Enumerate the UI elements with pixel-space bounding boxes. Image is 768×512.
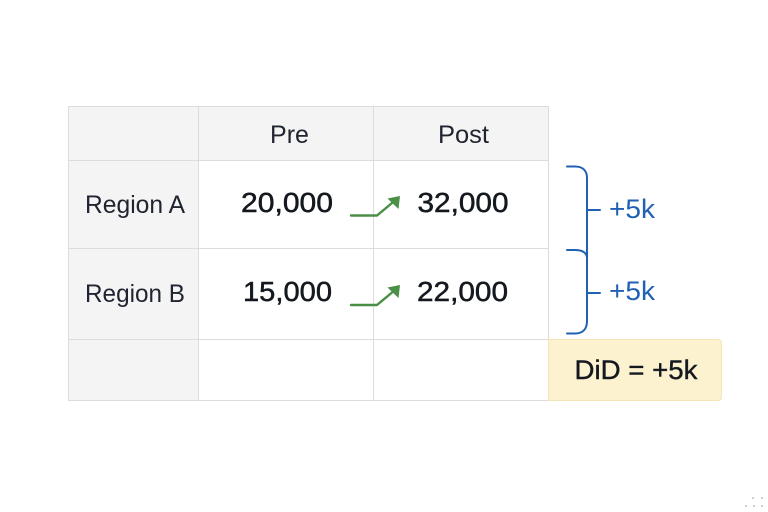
arrow: Region B trend <box>351 285 400 305</box>
column header: Pre: Pre <box>270 121 309 149</box>
value: Region A Post: 32,000 <box>418 187 508 218</box>
bracket: Region B difference <box>567 250 600 334</box>
row label: Region B: Region B <box>85 280 185 308</box>
value: Region B Post: 22,000 <box>417 276 508 307</box>
column header: Post: Post <box>438 121 489 149</box>
arrow: Region A trend <box>351 196 400 216</box>
value: Region B Pre: 15,000 <box>243 276 332 307</box>
label: Region A +5k: +5k <box>609 194 656 224</box>
value: Region A Pre: 20,000 <box>241 187 333 218</box>
callout: DiD result: DiD = +5k <box>574 355 698 385</box>
bracket: Region A difference <box>567 166 600 257</box>
callout: DiD result <box>548 340 722 400</box>
label: Region B +5k: +5k <box>609 276 656 306</box>
watermark dots <box>745 497 763 507</box>
table <box>68 106 549 401</box>
row label: Region A: Region A <box>85 191 185 219</box>
header and row label shading <box>68 106 549 401</box>
